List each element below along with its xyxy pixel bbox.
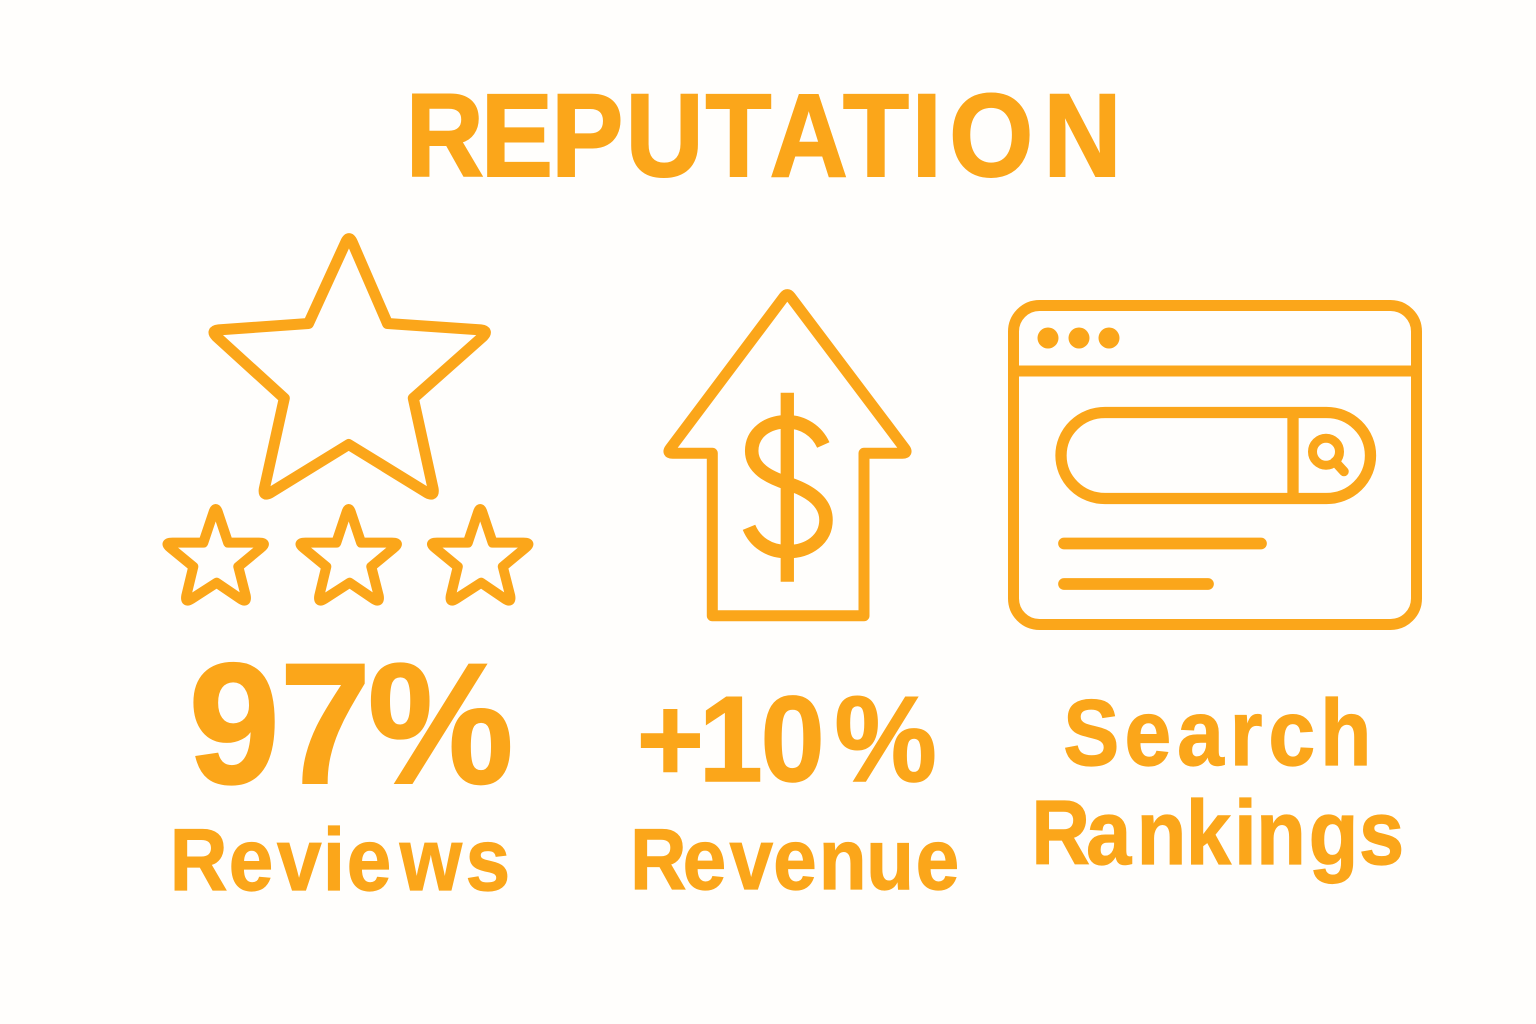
- label: Reviews: Reviews: [170, 810, 510, 909]
- stat: +10%: +10%: [637, 672, 937, 808]
- dollar sign: [749, 393, 826, 582]
- content lines: [1064, 538, 1261, 549]
- title: REPUTATION: [406, 70, 1122, 201]
- magnifier icon: [1312, 438, 1344, 472]
- browser dots: [1038, 328, 1120, 348]
- icon: three small stars: [167, 509, 528, 601]
- icon: large star: [214, 239, 485, 494]
- label: Revenue: Revenue: [630, 813, 959, 908]
- stat: 97%: 97%: [189, 627, 514, 820]
- label: Search: Search: [1063, 680, 1371, 785]
- icon: browser search window: [1014, 306, 1416, 624]
- label: Rankings: Rankings: [1031, 783, 1404, 884]
- icon: revenue arrow with dollar sign: [669, 295, 906, 616]
- search bar: [1061, 412, 1370, 498]
